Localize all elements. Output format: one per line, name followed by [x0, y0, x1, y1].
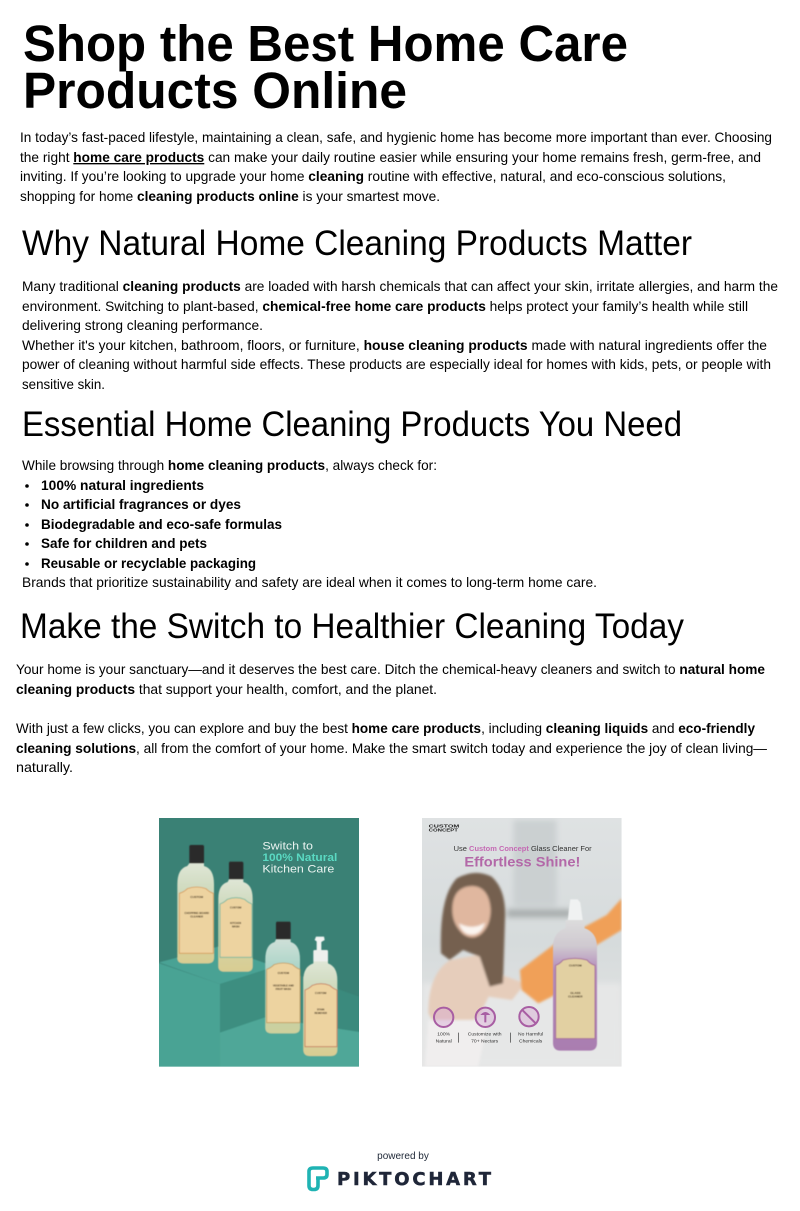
bottle 4: STAIN: [317, 1009, 324, 1012]
bottle 3: VEGETABLE AND: [273, 985, 294, 988]
bottle 1: CUSTOM: [190, 895, 204, 899]
logo: [428, 824, 459, 832]
woman: [425, 873, 525, 1067]
text block: why natural products matter: [22, 279, 778, 392]
intro paragraph: [20, 130, 772, 204]
bottle 2: [218, 862, 253, 972]
text block: essential products checklist: [22, 458, 597, 590]
benefit labels: Chemicals: [519, 1038, 543, 1044]
text block: make the switch: cleaning products that support your health, comfort, and the planet.: [16, 682, 437, 697]
benefit labels: No Harmful: [518, 1032, 543, 1038]
text block: essential products checklist: Reusable or recyclable packaging: [41, 556, 256, 571]
text block: essential products checklist: Brands that prioritize sustainability and safety are ideal when it comes to long-term home care.: [22, 575, 597, 590]
text block: essential products checklist: No artificial fragrances or dyes: [41, 497, 241, 512]
bottle 1: [177, 845, 214, 963]
text block: make the switch: naturally.: [16, 760, 73, 775]
bottle: [553, 899, 597, 1051]
headline: Switch to: [262, 840, 313, 852]
product image: natural kitchen care: [157, 818, 363, 1070]
logo: CONCEPT: [429, 828, 458, 833]
bottle 2: KITCHEN: [230, 922, 241, 925]
bottle 1: CLEANER: [190, 914, 203, 918]
text block: essential products checklist: 100% natural ingredients: [41, 478, 204, 493]
text block: essential products checklist: While browsing through home cleaning products, always check for:: [22, 458, 437, 473]
bottle 1: CHOPPING BOARD: [184, 911, 209, 915]
footer: powered by piktochart: PIKTOCHART: [337, 1169, 492, 1190]
bottle 3: CUSTOM: [278, 971, 290, 975]
intro paragraph: In today’s fast-paced lifestyle, maintaining a clean, safe, and hygienic home has become more important than ever. Choosing: [20, 130, 772, 145]
bottle 3: [265, 922, 300, 1033]
bottle 4: [303, 937, 337, 1056]
text block: make the switch: [16, 662, 767, 775]
title: Shop the Best Home Care: [23, 15, 628, 72]
bottle: CLEANER: [568, 995, 583, 999]
headline: Effortless Shine!: [464, 855, 580, 870]
text block: essential products checklist: Biodegradable and eco-safe formulas: [41, 517, 282, 532]
blurred bathroom background: [424, 820, 620, 1004]
product image: glass cleaner: [422, 818, 622, 1067]
text block: make the switch: Your home is your sanctuary—and it deserves the best care. Ditch the chemical-heavy cleaners and switch to natural home: [16, 662, 765, 677]
headline: Use Custom Concept Glass Cleaner For: [454, 846, 592, 853]
bottle 4: CUSTOM: [315, 991, 327, 995]
bottle 3: FRUIT WASH: [276, 988, 291, 991]
text block: why natural products matter: sensitive skin.: [22, 377, 105, 392]
heading: why natural products matter: Why Natural Home Cleaning Products Matter: [22, 224, 692, 263]
logo: CUSTOM: [429, 823, 460, 828]
bottle 4: REMOVER: [314, 1012, 327, 1015]
bottle 2: WASH: [232, 925, 240, 928]
title: Products Online: [23, 62, 407, 119]
benefit labels: [436, 1032, 543, 1043]
text block: why natural products matter: Many traditional cleaning products are loaded with harsh chemicals that can affect your skin, irritate allergies, and harm the: [22, 279, 778, 294]
text block: why natural products matter: delivering strong cleaning performance.: [22, 318, 263, 333]
text block: make the switch: With just a few clicks, you can explore and buy the best home care products, including cleaning liquids and eco-friendly: [16, 721, 755, 736]
intro paragraph: inviting. If you’re looking to upgrade your home cleaning routine with effective, natural, and eco-conscious solutions,: [20, 169, 726, 184]
bottle: CUSTOM: [569, 964, 582, 968]
benefit icons: [434, 1007, 539, 1027]
text block: why natural products matter: Whether it's your kitchen, bathroom, floors, or furniture, house cleaning products made with natural ingredients offer the: [22, 338, 767, 353]
headline: 100% Natural: [262, 852, 337, 864]
intro paragraph: the right home care products can make your daily routine easier while ensuring your home remains fresh, germ-free, and: [20, 150, 761, 165]
benefit labels: Natural: [436, 1038, 452, 1044]
heading: essential products: Essential Home Cleaning Products You Need: [22, 405, 682, 444]
orange cloth: [520, 898, 622, 1003]
headline: [263, 842, 336, 872]
benefit labels: 100%: [437, 1032, 451, 1038]
benefit labels: 70+ Nectars: [471, 1038, 499, 1044]
heading: make the switch: Make the Switch to Healthier Cleaning Today: [20, 607, 684, 646]
text block: make the switch: cleaning solutions, all from the comfort of your home. Make the smart switch today and experience the joy of clean living—: [16, 741, 767, 756]
bottle 2: CUSTOM: [230, 906, 242, 910]
benefit labels: Customize with: [468, 1032, 502, 1038]
headline: Kitchen Care: [262, 863, 334, 875]
steps: [157, 947, 363, 1070]
bottle: GLASS: [570, 991, 580, 995]
text block: essential products checklist: Safe for children and pets: [41, 536, 207, 551]
icon: piktochart logo: [309, 1168, 327, 1190]
footer: powered by piktochart: powered by: [377, 1151, 429, 1162]
headline: [454, 846, 592, 866]
footer: powered by piktochart: [309, 1151, 492, 1190]
text block: why natural products matter: environment. Switching to plant-based, chemical-free home care products helps protect your family’s health while still: [22, 299, 748, 314]
text block: why natural products matter: power of cleaning without harmful side effects. These products are especially ideal for homes with kids, pets, or people with: [22, 357, 771, 372]
intro paragraph: shopping for home cleaning products online is your smartest move.: [20, 189, 440, 204]
title: [23, 15, 628, 119]
